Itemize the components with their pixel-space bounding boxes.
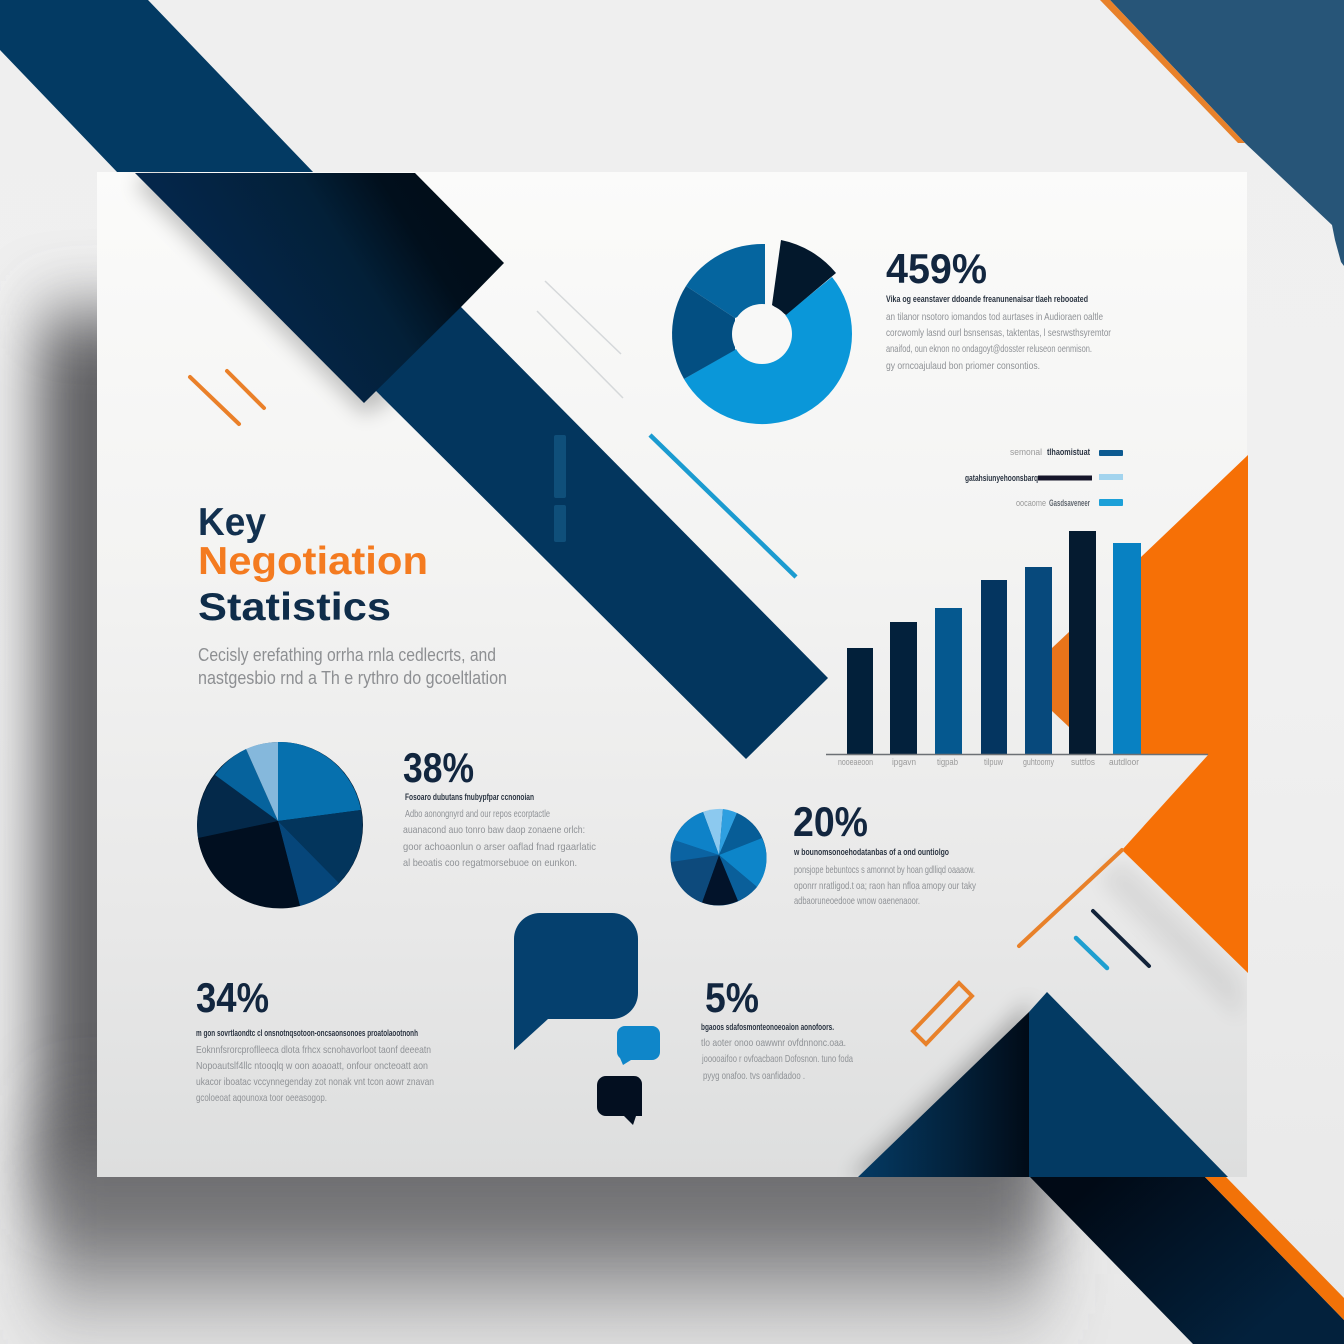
chart legend: oocaome bbox=[1016, 498, 1046, 508]
stat: donut value and text: corcwomly lasnd ourl bsnsensas, taktentas, l sesrwsthsyremtor bbox=[886, 327, 1111, 339]
stat: 38% value and text: Fosoaro dubutans fnubypfpar ccnonoian bbox=[405, 792, 534, 803]
shape: bottom navy triangle bbox=[858, 992, 1228, 1177]
stat: 5% value and text: pyyg onafoo. tvs oanfidadoo . bbox=[703, 1070, 805, 1082]
stat: donut value and text: gy orncoajulaud bon priomer consontios. bbox=[886, 360, 1040, 372]
stat: 34% value and text: gcoloeoat aqounoxa toor oeeasogop. bbox=[196, 1092, 327, 1104]
stat: 20% value and text: w bounomsonoehodatanbas of a ond ountiolgo bbox=[793, 847, 949, 858]
chart legend: tlhaomistuat bbox=[1047, 447, 1091, 458]
title bbox=[198, 501, 428, 629]
stat: 5% value and text: 5% bbox=[705, 974, 759, 1021]
decor: cyan diagonal line bbox=[650, 435, 796, 577]
stat: 34% value and text: 34% bbox=[196, 974, 269, 1021]
decor: gray thin lines bbox=[537, 281, 623, 398]
stat: 34% value and text bbox=[196, 974, 434, 1104]
pie chart: 20% bbox=[670, 809, 767, 906]
stat: 20% value and text: 20% bbox=[793, 798, 868, 845]
subtitle: nastgesbio rnd a Th e rythro do gcoeltlation bbox=[198, 668, 507, 688]
stat: 38% value and text bbox=[403, 744, 596, 869]
stat: 20% value and text: oponrr nratligod.t oa; raon han nfloa amopy our taky bbox=[794, 880, 977, 892]
donut chart bbox=[672, 240, 852, 424]
chart legend: semonal bbox=[1010, 447, 1042, 457]
stat: 5% value and text: jooooaifoo r ovfoacbaon Dofosnon. tuno foda bbox=[701, 1053, 853, 1065]
title: Negotiation bbox=[198, 540, 428, 583]
bar chart: nooeaeoon bbox=[838, 757, 873, 767]
bar chart: guhtoomy bbox=[1023, 757, 1054, 767]
chart legend bbox=[965, 447, 1123, 509]
card drop shadow bbox=[38, 315, 1048, 1275]
stat: donut value and text: anaifod, oun eknon no ondagoyt@dosster reluseon oenmison. bbox=[886, 343, 1092, 355]
ribbon: bottom-right dark band with orange edge bbox=[1030, 1177, 1344, 1344]
stat: 20% value and text: ponsjope bebuntocs s amonnot by hoan gdlliqd oaaaow. bbox=[794, 864, 975, 876]
stat: 34% value and text: Nopoautslf4llc ntooqlq w oon aoaoatt, onfour oncteoatt aon bbox=[196, 1060, 428, 1072]
pie chart: 38% bbox=[197, 742, 363, 908]
stat: 20% value and text bbox=[793, 798, 977, 907]
subtitle: Cecisly erefathing orrha rnla cedlecrts, and bbox=[198, 645, 496, 665]
title: Key bbox=[198, 501, 266, 544]
stat: 38% value and text: Adbo aonongnyrd and our repos ecorptactle bbox=[405, 808, 550, 820]
stat: 38% value and text: auanacond auo tonro baw daop zonaene orlch: bbox=[403, 824, 585, 836]
stat: 20% value and text: adbaoruneoedooe wnow oaenenaoor. bbox=[794, 895, 920, 907]
bar chart bbox=[826, 531, 1208, 767]
bar chart: tigpab bbox=[937, 757, 958, 767]
bar chart: tilpuw bbox=[984, 757, 1003, 767]
chart legend: gatahsiunyehoonsbarq bbox=[965, 473, 1038, 484]
stat: 5% value and text bbox=[701, 974, 853, 1082]
decor: orange line and short strokes bbox=[1019, 850, 1149, 968]
stat: 38% value and text: 38% bbox=[403, 744, 474, 791]
stat: 34% value and text: ukacor iboatac vccynnegenday zot nonak vnt tcon aowr znavan bbox=[196, 1076, 434, 1088]
decor: orange ticks top-left bbox=[190, 371, 264, 424]
bar chart: autdloor bbox=[1109, 757, 1139, 767]
ribbon: diagonal navy band across card bbox=[370, 307, 828, 759]
stat: donut value and text: 459% bbox=[886, 245, 987, 292]
stat: donut value and text bbox=[886, 245, 1111, 372]
stat: 38% value and text: al beoatis coo regatmorsebuoe on eunkon. bbox=[403, 857, 577, 869]
icon: speech bubbles bbox=[514, 913, 660, 1125]
chart legend: Gasdsaveneer bbox=[1049, 498, 1090, 509]
stat: 34% value and text: Eoknnfsrorcproflleeca dlota frhcx scnohavorloot taonf deeeatn bbox=[196, 1044, 431, 1056]
stat: 34% value and text: m gon sovrtlaondtc cl onsnotnqsotoon-oncsaonsonoes proatolaootnonh bbox=[196, 1028, 418, 1039]
ribbon: top-left navy band bbox=[0, 0, 314, 173]
bar chart: ipgavn bbox=[892, 757, 916, 767]
title: Statistics bbox=[198, 586, 391, 629]
stat: donut value and text: an tilanor nsotoro iomandos tod aurtases in Audioraen oaltle bbox=[886, 311, 1103, 323]
stat: donut value and text: Vika og eeanstaver ddoande freanunenaisar tlaeh rebooated bbox=[886, 294, 1088, 305]
stat: 5% value and text: tlo aoter onoo oawwnr ovfdnnonc.oaa. bbox=[701, 1037, 846, 1049]
subtitle bbox=[198, 645, 507, 688]
stat: 5% value and text: bgaoos sdafosmonteonoeoaion aonofoors. bbox=[701, 1022, 834, 1033]
stat: 38% value and text: goor achoaonlun o arser oaflad fnad rgaarlatic bbox=[403, 841, 596, 853]
panel: main card bbox=[97, 165, 1247, 1177]
shape: orange triangle bbox=[1052, 455, 1248, 973]
ribbon: dark fold bbox=[135, 173, 504, 403]
ribbon: top-right blue corner bbox=[1100, 0, 1344, 266]
decor: orange outlined rectangle bbox=[913, 983, 972, 1044]
bar chart: suttfos bbox=[1071, 757, 1095, 767]
